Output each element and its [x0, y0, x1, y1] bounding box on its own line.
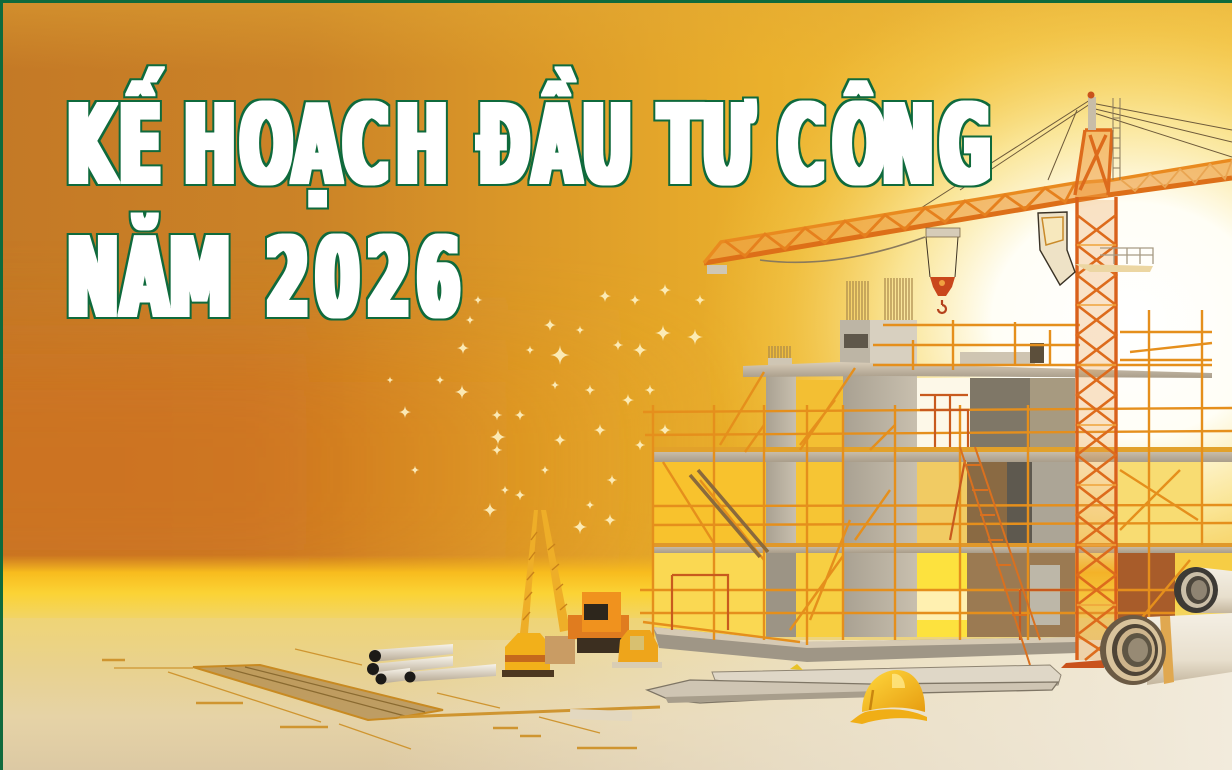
- scaffolding: [640, 310, 1232, 665]
- back roll: [1174, 567, 1232, 613]
- floor blueprint lines: [102, 649, 660, 749]
- slabs: [743, 362, 1212, 378]
- tower crane: [704, 92, 1232, 668]
- storey walls: [766, 376, 796, 448]
- paper rolls: large: [1100, 567, 1232, 685]
- crane body: [505, 633, 550, 672]
- base plinth: [653, 627, 1077, 662]
- crane mast: [1061, 92, 1120, 668]
- roof concrete core: [840, 320, 917, 364]
- orange truck: [568, 592, 629, 653]
- title: [67, 67, 991, 343]
- top rebar: [769, 278, 912, 358]
- scaffolding stairs and ladder: [690, 470, 768, 557]
- small crawler crane: [502, 510, 575, 677]
- building: concrete structure: [653, 278, 1232, 662]
- crane platform: [1075, 248, 1153, 272]
- crane cab: [1038, 212, 1075, 285]
- crane hook block: [930, 277, 955, 313]
- crane cables: [760, 100, 1232, 277]
- sparkles: [386, 284, 705, 534]
- scaffolding rails: [640, 408, 1232, 642]
- title line 1: KẾ HOẠCH ĐẦU TƯ CÔNG: [67, 67, 991, 210]
- scaffolding braces: [663, 368, 1198, 630]
- title line 2: NĂM 2026: [67, 212, 460, 343]
- crane trolley: [926, 228, 960, 237]
- front roll: [1100, 613, 1232, 685]
- yellow machine: [612, 630, 662, 668]
- pipe bundle: [367, 644, 496, 684]
- stacked sheets: [647, 664, 1061, 703]
- crane tip counterweight: [707, 265, 727, 274]
- hard hat: [850, 670, 927, 724]
- blueprint sheet on floor: [570, 709, 632, 721]
- crane jib: [704, 160, 1232, 263]
